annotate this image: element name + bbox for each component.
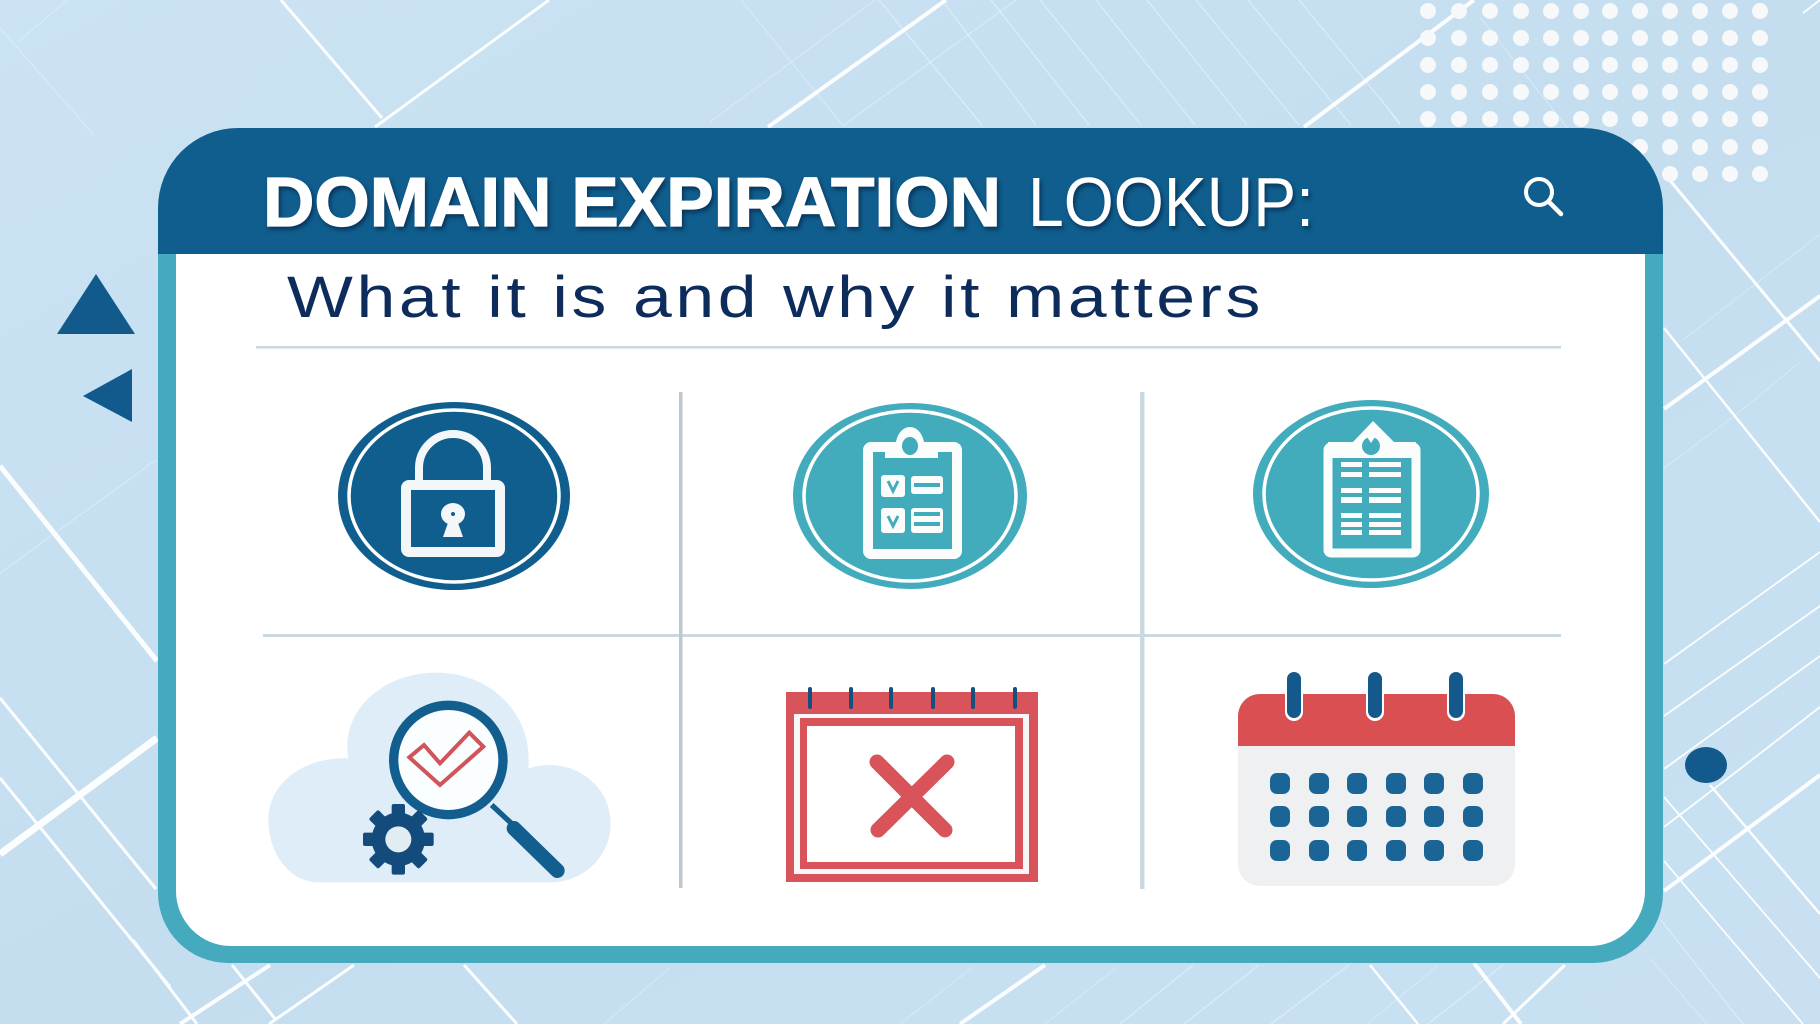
title: DOMAIN EXPIRATION — [263, 163, 1001, 241]
icon: document clipboard badge — [1253, 400, 1489, 588]
grid dividers — [256, 346, 1561, 889]
icon: checklist clipboard badge — [793, 403, 1027, 589]
icon: cloud with magnifier and gear — [268, 673, 611, 882]
icon: calendar with X — [786, 687, 1038, 882]
icon: lock badge — [338, 402, 570, 590]
panel: main card — [158, 128, 1663, 963]
title: LOOKUP: — [1028, 163, 1314, 241]
header bar — [158, 128, 1663, 254]
triangle up — [57, 274, 135, 334]
title — [263, 163, 1314, 241]
triangle left — [83, 369, 132, 422]
subtitle: What it is and why it matters — [287, 265, 1264, 330]
icon: calendar — [1238, 672, 1515, 886]
icon: search — [1526, 179, 1561, 214]
dot pattern — [1420, 3, 1768, 182]
blue dot — [1685, 747, 1727, 783]
